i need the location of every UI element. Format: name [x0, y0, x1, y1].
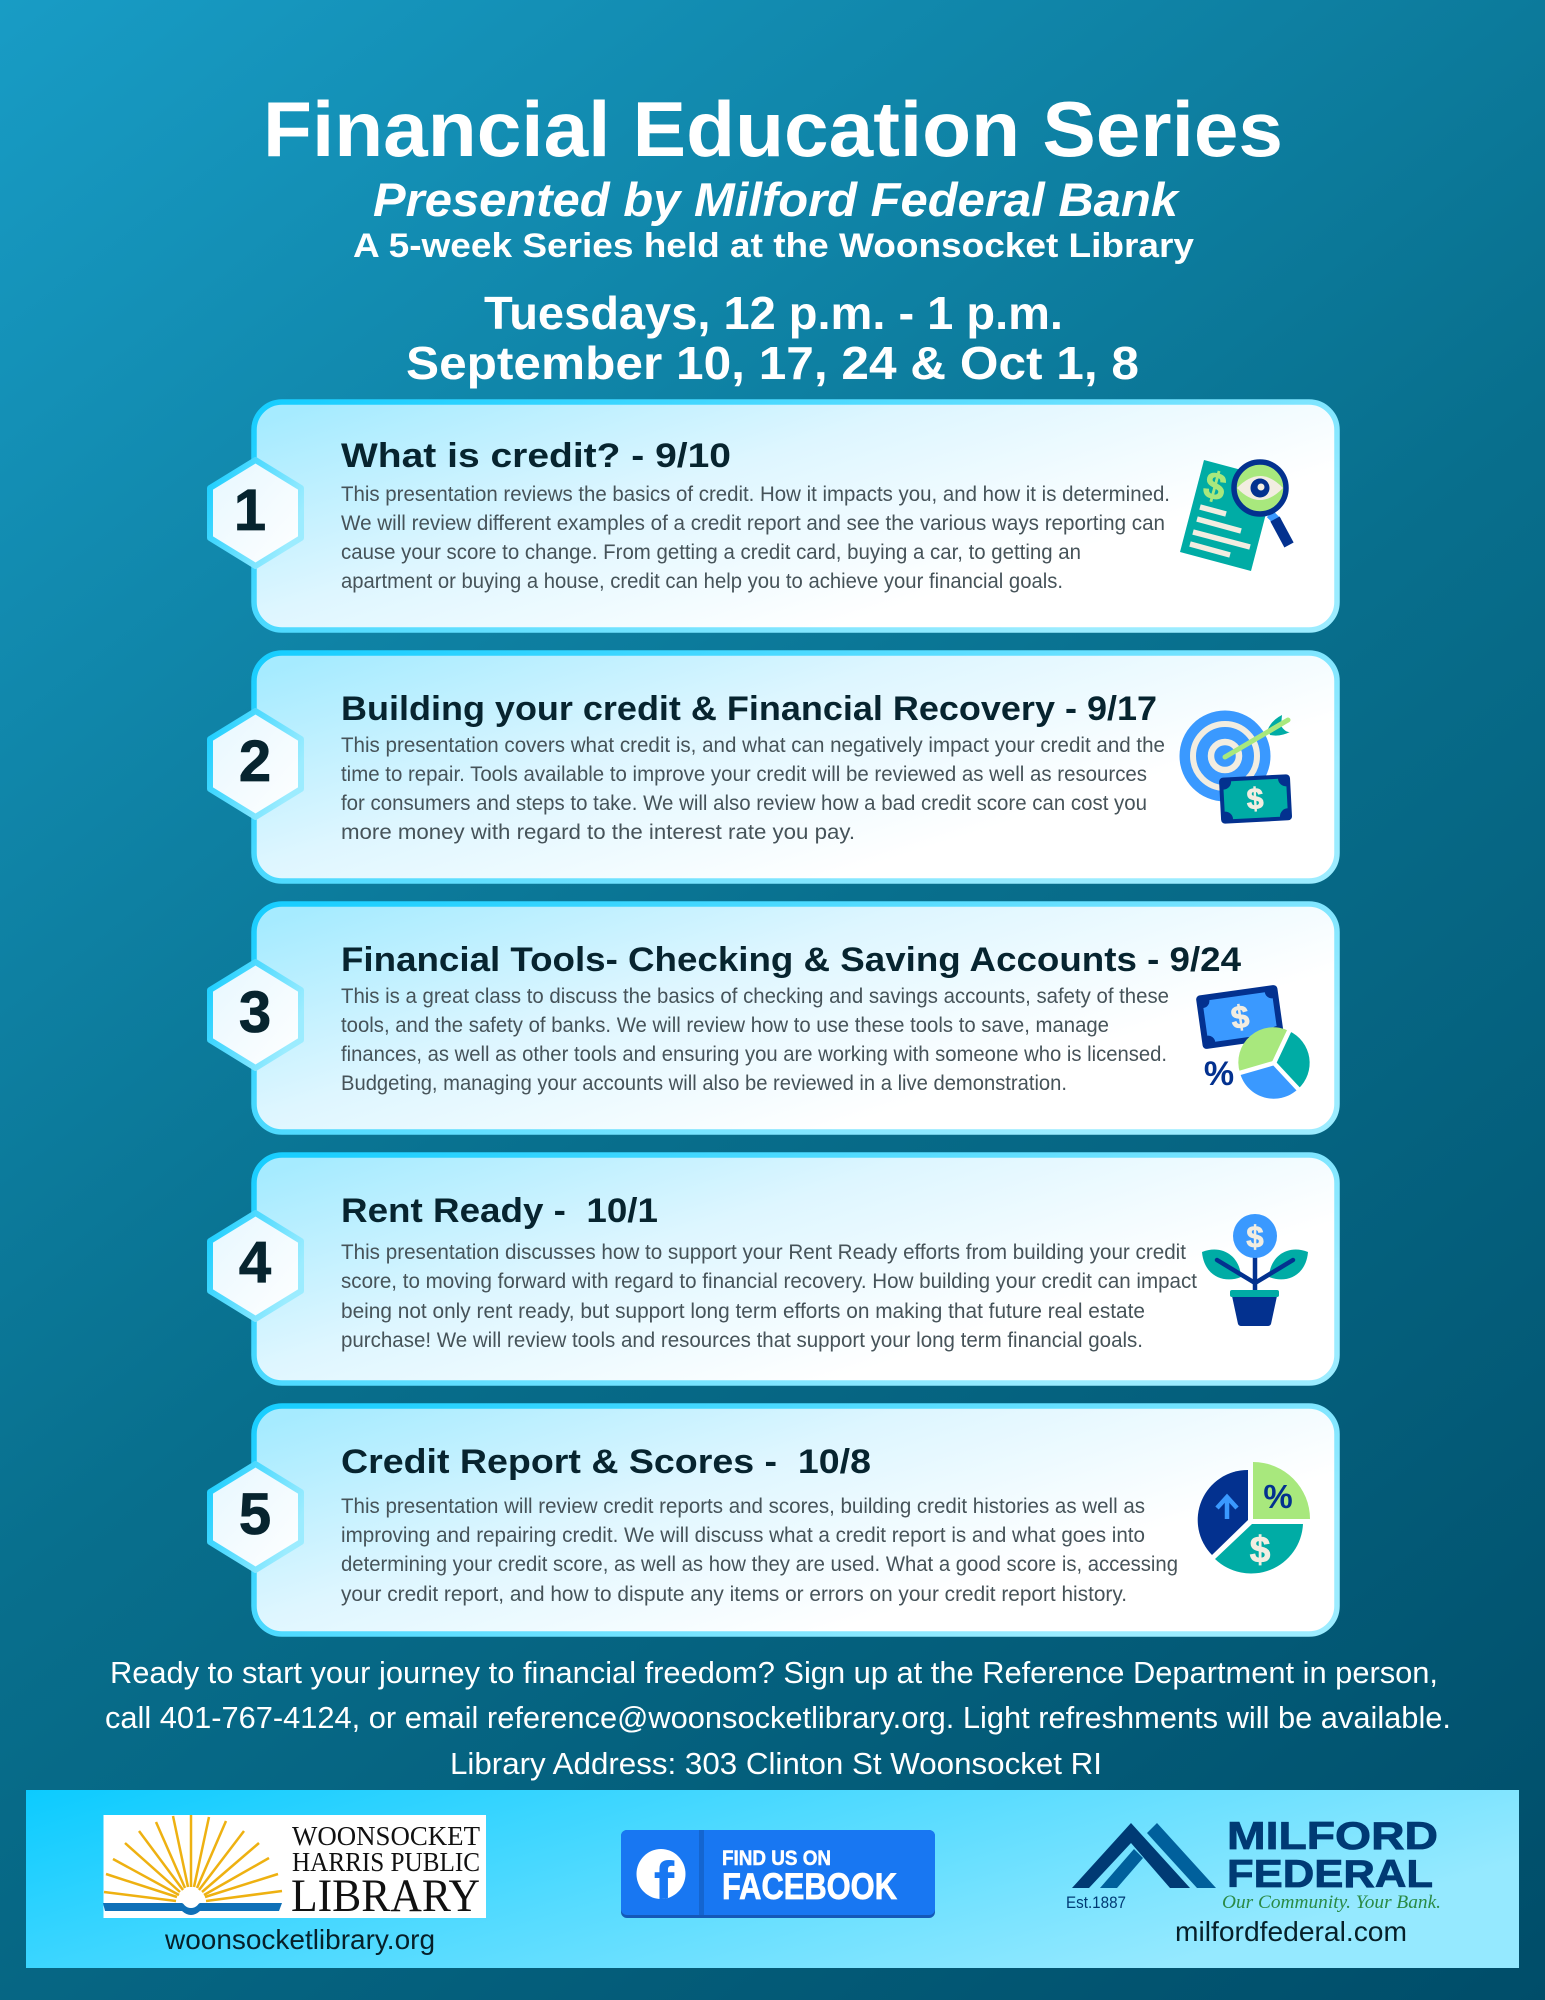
icon: credit report with magnifier — [1180, 460, 1289, 571]
call to action: Library Address: 303 Clinton St Woonsocket RI — [450, 1746, 1102, 1781]
body text: your credit report, and how to dispute any items or errors on your credit report history. — [341, 1583, 1127, 1606]
badge: number 5 — [210, 1464, 301, 1570]
body text: This presentation discusses how to support your Rent Ready efforts from building your credit — [341, 1241, 1186, 1264]
body text: We will review different examples of a credit report and see the various ways reporting can — [341, 512, 1165, 535]
icon: credit report with magnifier: $ — [1199, 464, 1230, 510]
badge: number 2 — [210, 711, 301, 817]
icon: segmented pie chart: $ — [1250, 1529, 1271, 1570]
body text: cause your score to change. From getting a credit card, buying a car, to getting an — [341, 541, 1081, 564]
logo: Woonsocket Harris Public Library: WOONSOCKET — [292, 1821, 480, 1851]
band background — [26, 1790, 1519, 1968]
icon: money plant — [1202, 1214, 1308, 1326]
logo: Milford Federal: Our Community. Your Bank. — [1222, 1892, 1441, 1913]
body text: score, to moving forward with regard to financial recovery. How building your credit can impact — [341, 1270, 1197, 1293]
body text: for consumers and steps to take. We will also review how a bad credit score can cost you — [341, 792, 1147, 815]
logo: Woonsocket Harris Public Library — [103, 1815, 486, 1922]
series description: A 5-week Series held at the Woonsocket Library — [353, 227, 1194, 265]
badge: number 4 — [210, 1213, 301, 1319]
panel: session 2 — [210, 653, 1337, 881]
icon: money and pie chart — [1196, 985, 1310, 1099]
badge: number 2: 2 — [239, 729, 271, 794]
heading: What is credit? - 9/10 — [341, 437, 731, 475]
card background — [254, 653, 1337, 881]
badge: number 4: 4 — [239, 1230, 271, 1295]
body text: time to repair. Tools available to improve your credit will be reviewed as well as resources — [341, 763, 1147, 786]
body text: purchase! We will review tools and resources that support your long term financial goals. — [341, 1329, 1143, 1352]
title: Financial Education Series — [263, 85, 1283, 173]
button: find us on Facebook: FACEBOOK — [722, 1866, 897, 1907]
icon: money plant: $ — [1246, 1219, 1264, 1254]
body text: finances, as well as other tools and ensuring you are working with someone who is licensed. — [341, 1043, 1167, 1066]
body text — [341, 1495, 1178, 1606]
call to action: call 401-767-4124, or email reference@woonsocketlibrary.org. Light refreshments will be available. — [105, 1700, 1451, 1735]
logo: Milford Federal: Est.1887 — [1066, 1893, 1126, 1912]
body text: Budgeting, managing your accounts will also be reviewed in a live demonstration. — [341, 1072, 1067, 1095]
button: find us on Facebook: FIND US ON — [722, 1847, 831, 1870]
icon: money and pie chart: $ — [1229, 998, 1252, 1036]
icon: target and money: $ — [1246, 783, 1265, 816]
body text — [341, 1241, 1197, 1352]
body text — [341, 734, 1165, 844]
body text — [341, 985, 1169, 1095]
schedule: Tuesdays, 12 p.m. - 1 p.m. — [484, 287, 1063, 339]
heading: Credit Report & Scores - 10/8 — [341, 1443, 871, 1481]
logo: Milford Federal: FEDERAL — [1227, 1853, 1433, 1896]
body text: This presentation will review credit reports and scores, building credit histories as well as — [341, 1495, 1145, 1518]
badge: number 1: 1 — [234, 478, 266, 543]
heading: Building your credit & Financial Recovery - 9/17 — [341, 690, 1157, 728]
panel: session 5 — [210, 1406, 1337, 1634]
body text: improving and repairing credit. We will discuss what a credit report is and what goes into — [341, 1524, 1145, 1547]
badge: number 3: 3 — [239, 980, 271, 1045]
heading: Financial Tools- Checking & Saving Accounts - 9/24 — [341, 941, 1241, 979]
body text: tools, and the safety of banks. We will review how to use these tools to save, manage — [341, 1014, 1109, 1037]
button: find us on Facebook — [621, 1830, 935, 1919]
icon: target and money — [1180, 710, 1292, 824]
card background — [254, 1155, 1337, 1383]
panel: session 1 — [210, 402, 1337, 630]
library website: woonsocketlibrary.org — [164, 1924, 435, 1955]
logo: Woonsocket Harris Public Library: HARRIS PUBLIC — [292, 1847, 480, 1877]
card background — [254, 402, 1337, 630]
footer band — [26, 1790, 1519, 1968]
icon: money and pie chart: % — [1204, 1055, 1234, 1093]
button: find us on Facebook: f — [654, 1850, 675, 1919]
body text: This presentation covers what credit is, and what can negatively impact your credit and the — [341, 734, 1165, 757]
body text: This is a great class to discuss the basics of checking and savings accounts, safety of these — [341, 985, 1169, 1008]
call to action: Ready to start your journey to financial freedom? Sign up at the Reference Department in person, — [110, 1655, 1438, 1690]
icon: segmented pie chart — [1198, 1462, 1310, 1574]
schedule: September 10, 17, 24 & Oct 1, 8 — [406, 337, 1139, 389]
subtitle: Presented by Milford Federal Bank — [373, 173, 1181, 226]
icon: segmented pie chart: % — [1263, 1478, 1293, 1515]
card background — [254, 1406, 1337, 1634]
logo: Milford Federal: MILFORD — [1227, 1815, 1438, 1858]
body text: apartment or buying a house, credit can help you to achieve your financial goals. — [341, 570, 1063, 593]
logo: Woonsocket Harris Public Library: LIBRARY — [291, 1870, 480, 1922]
body text: being not only rent ready, but support long term efforts on making that future real estate — [341, 1300, 1145, 1323]
body text: more money with regard to the interest rate you pay. — [341, 821, 855, 844]
schedule — [406, 287, 1139, 389]
body text: determining your credit score, as well as how they are used. What a good score is, accessing — [341, 1553, 1178, 1576]
panel: session 3 — [210, 904, 1337, 1132]
badge: number 5: 5 — [239, 1482, 271, 1547]
badge: number 3 — [210, 962, 301, 1068]
bank website: milfordfederal.com — [1175, 1916, 1407, 1947]
badge: number 1 — [210, 460, 301, 566]
card background — [254, 904, 1337, 1132]
heading: Rent Ready - 10/1 — [341, 1192, 658, 1230]
logo: Milford Federal — [1066, 1815, 1441, 1913]
panel: session 4 — [210, 1155, 1337, 1383]
body text — [341, 483, 1170, 593]
body text: This presentation reviews the basics of credit. How it impacts you, and how it is determined. — [341, 483, 1170, 506]
call to action — [105, 1655, 1451, 1781]
